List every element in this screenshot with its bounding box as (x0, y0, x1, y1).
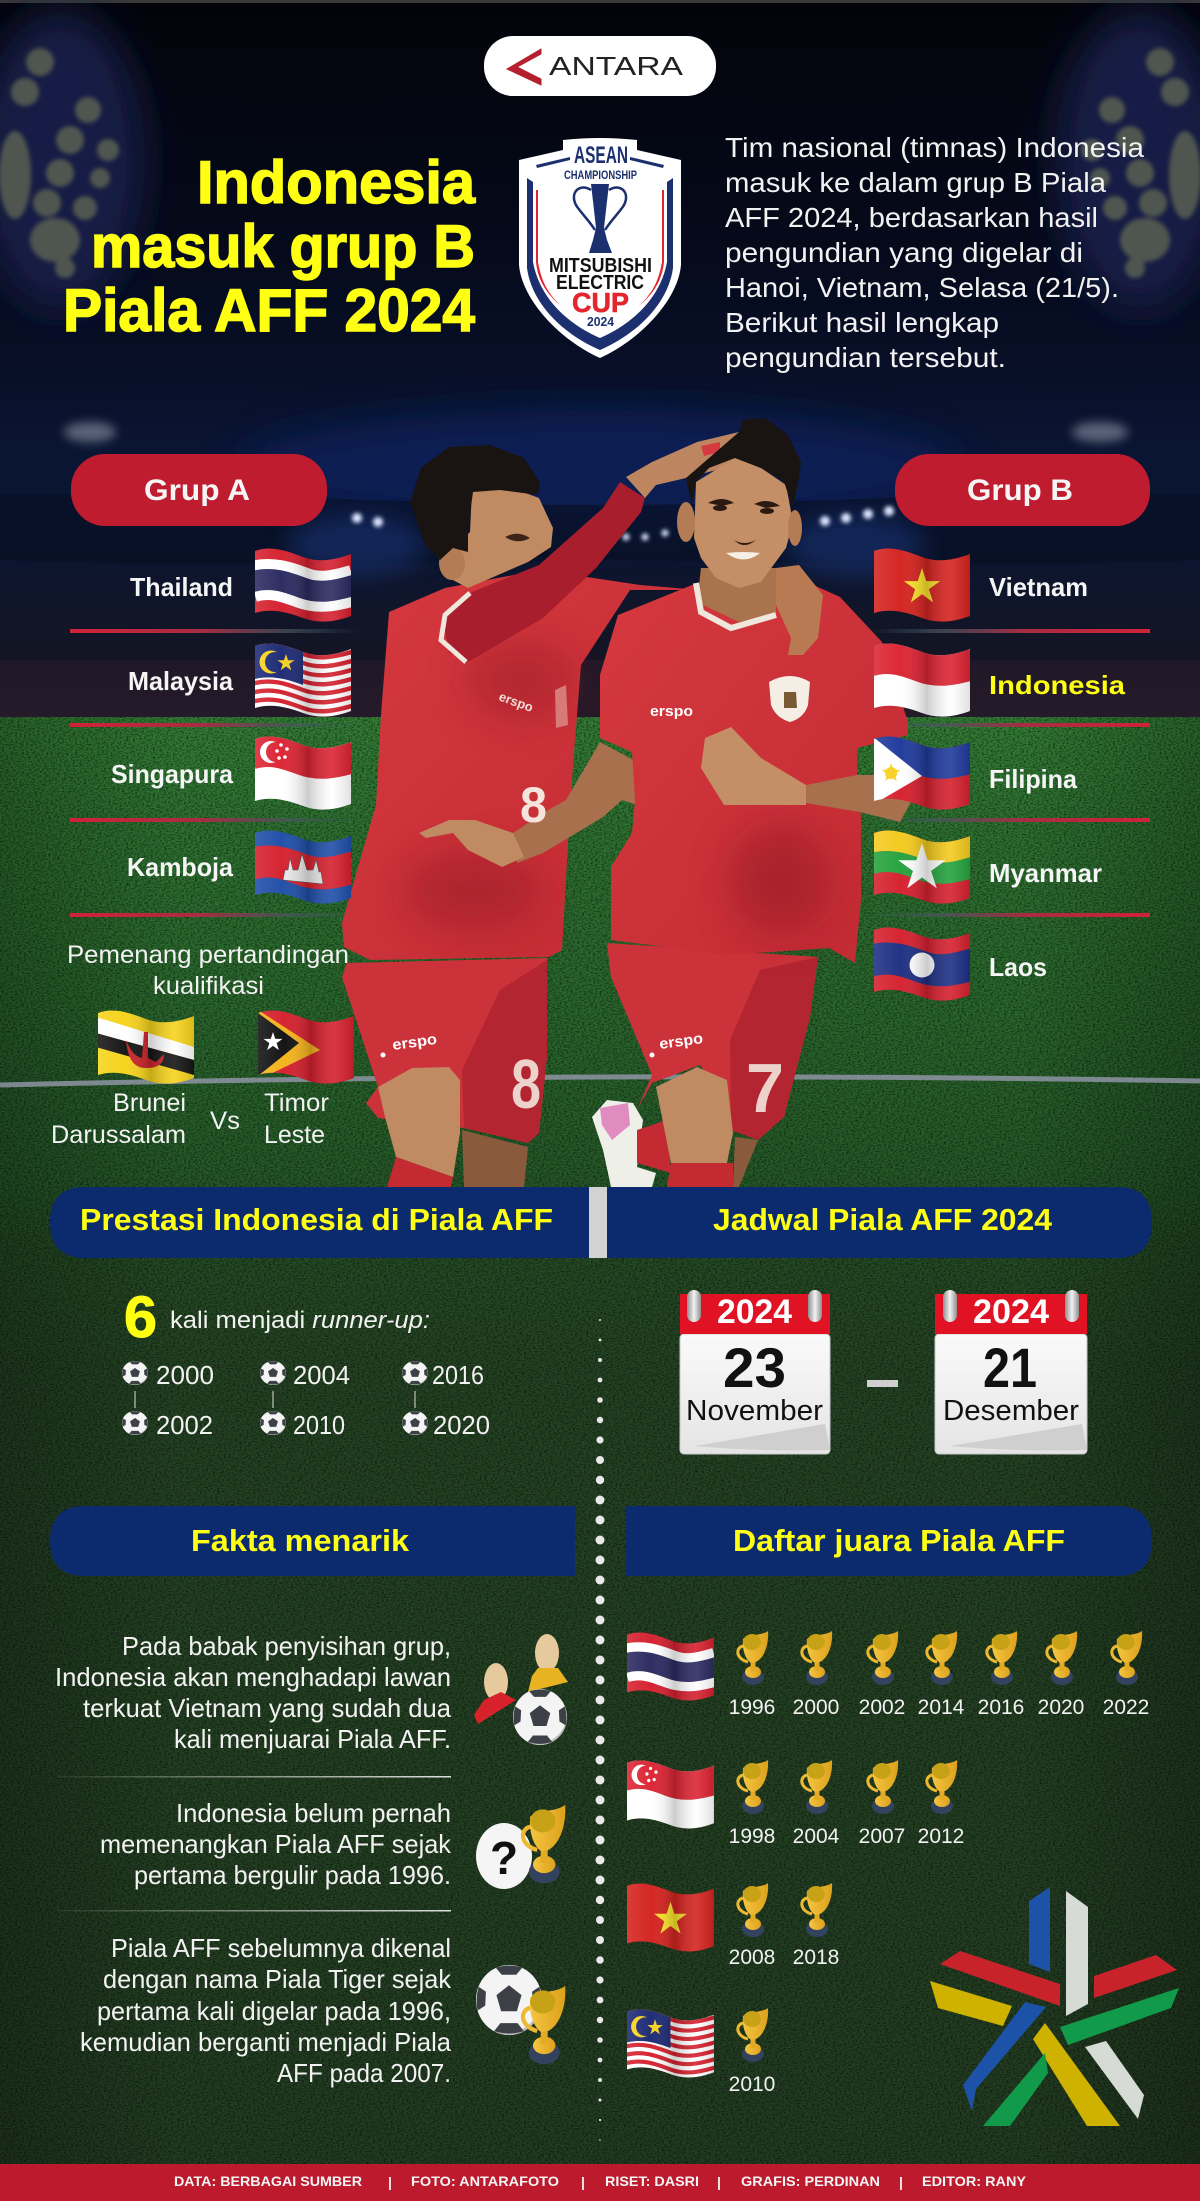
icon: ANTARA chevron (507, 49, 541, 85)
fact 3 text (80, 1933, 452, 2088)
Timor Leste label: Leste (264, 1121, 325, 1149)
intro paragraph: pengundian yang digelar di (725, 237, 1083, 268)
footer credits bar (0, 2164, 1200, 2201)
Malaysia champions row (623, 2008, 775, 2096)
Thailand row (130, 548, 355, 628)
Thailand champions row: 2020 (1038, 1696, 1084, 1719)
group A and B dividers (70, 629, 1150, 917)
Laos row: Laos (989, 952, 1047, 982)
icon: question mark and trophy (476, 1805, 565, 1889)
date range dash (867, 1380, 898, 1387)
intro paragraph: Tim nasional (timnas) Indonesia (725, 132, 1144, 163)
logo text: CUP (572, 287, 629, 318)
logo: AFF star (930, 1887, 1179, 2126)
footer credits bar: DATA: BERBAGAI SUMBER (174, 2173, 362, 2189)
logo: ANTARA pill (484, 36, 716, 96)
runner-up years: 2020 (433, 1410, 490, 1440)
fact 1 text: terkuat Vietnam yang sudah dua (83, 1693, 452, 1723)
runner-up years: 2004 (293, 1360, 350, 1390)
runner-up years: 2000 (156, 1360, 214, 1390)
fact 1 text: kali menjuarai Piala AFF. (174, 1724, 451, 1754)
Thailand champions row: 2002 (859, 1696, 905, 1719)
calendar: 21 Desember 2024: Desember (943, 1395, 1079, 1427)
calendar: 23 November 2024: 23 (723, 1336, 786, 1399)
footer credits bar: GRAFIS: PERDINAN (741, 2173, 880, 2189)
qualification caption: Pemenang pertandingan (67, 941, 349, 969)
Filipina row (870, 736, 1078, 816)
fact 2 text: memenangkan Piala AFF sejak (100, 1829, 452, 1859)
heading bar: Daftar juara (626, 1506, 1152, 1576)
panel: runner-up record (122, 1285, 490, 1440)
left player: 8 (520, 777, 547, 833)
Myanmar row: Myanmar (989, 858, 1102, 888)
right player: erspo (650, 703, 693, 720)
Kamboja row: Kamboja (127, 852, 234, 882)
year connectors (135, 1391, 415, 1408)
Laos row (870, 927, 1047, 1007)
title (63, 149, 476, 344)
Malaysia row (128, 643, 355, 723)
left player: 8 (511, 1045, 541, 1123)
Thailand champions row: 1996 (729, 1696, 775, 1719)
title: Indonesia (197, 149, 476, 216)
Thailand champions row: 2000 (793, 1696, 839, 1719)
fact 3 text: Piala AFF sebelumnya dikenal (111, 1933, 451, 1963)
Malaysia champions row: 2010 (729, 2073, 775, 2096)
footer credits bar: RISET: DASRI (605, 2173, 699, 2189)
footer credits bar: | (717, 2174, 721, 2190)
Singapura champions row: 2004 (793, 1825, 840, 1848)
qualification caption (67, 941, 349, 1000)
Vietnam champions row: 2018 (793, 1946, 839, 1969)
Timor Leste label: Timor (264, 1089, 329, 1117)
separator (57, 1910, 451, 1912)
title: masuk grup B (91, 213, 475, 280)
logo text (549, 142, 652, 329)
intro paragraph: pengundian tersebut. (725, 342, 1006, 373)
fact 3 text: AFF pada 2007. (277, 2058, 451, 2088)
fact 2 text: Indonesia belum pernah (176, 1798, 451, 1828)
Thailand row: Thailand (130, 572, 233, 602)
footer credits bar: FOTO: ANTARAFOTO (411, 2173, 559, 2189)
heading bar: Fakta menarik: Fakta menarik (191, 1523, 410, 1558)
Vietnam row: Vietnam (989, 572, 1088, 602)
flag: Brunei (96, 1010, 194, 1090)
Thailand champions row: 2022 (1103, 1696, 1149, 1719)
group B heading pill (895, 454, 1150, 526)
fact 3 text: pertama kali digelar pada 1996, (97, 1996, 451, 2026)
footer credits bar: | (581, 2174, 585, 2190)
background: night stadium sky (0, 0, 1200, 720)
panel: list of champions (623, 1631, 1149, 2096)
fact 1 text (55, 1631, 452, 1754)
logo text: ELECTRIC (556, 272, 644, 294)
group B heading pill: Grup B (967, 474, 1073, 507)
calendar: 21 Desember 2024: 21 (983, 1336, 1037, 1399)
Brunei Darussalam label: Brunei (113, 1089, 186, 1117)
title: Piala AFF 2024 (63, 277, 476, 344)
Thailand champions row: 2014 (918, 1696, 965, 1719)
Thailand champions row (623, 1631, 1149, 1719)
logo text: MITSUBISHI (549, 255, 652, 277)
Singapura champions row: 2007 (859, 1825, 905, 1848)
logo: Mitsubishi Electric Cup shield (519, 138, 681, 358)
left player: erspo (391, 1031, 438, 1054)
icon: question mark and trophy: ? (490, 1832, 518, 1884)
fact 1 text: Indonesia akan menghadapi lawan (55, 1662, 451, 1692)
group A heading pill (71, 454, 327, 526)
runner-up years (156, 1360, 490, 1440)
Singapura row: Singapura (111, 759, 234, 789)
Singapura row (111, 736, 355, 816)
photo: two Indonesian players celebrating (342, 418, 912, 1187)
fact 2 text: pertama bergulir pada 1996. (134, 1860, 451, 1890)
intro paragraph: AFF 2024, berdasarkan hasil (725, 202, 1098, 233)
Vietnam row (874, 548, 1088, 628)
Singapura champions row (623, 1760, 964, 1848)
runner-up caption: kali menjadi runner-up: (170, 1307, 430, 1334)
logo wordmark: ANTARA (549, 51, 684, 81)
heading bar: Prestasi Indonesia: Prestasi Indonesia di Piala AFF (80, 1202, 553, 1237)
left player (342, 432, 750, 1187)
Kamboja row (127, 830, 355, 910)
qualification caption: kualifikasi (153, 972, 264, 1000)
calendar: 23 November 2024: November (686, 1395, 823, 1427)
separator (57, 1776, 451, 1778)
fact 3 text: kemudian berganti menjadi Piala (80, 2027, 452, 2057)
logo text: ASEAN (574, 142, 628, 169)
fact 3 text: dengan nama Piala Tiger sejak (103, 1964, 452, 1994)
panel: group A (71, 454, 355, 910)
right player: 7 (746, 1049, 784, 1127)
Vietnam champions row: 2008 (729, 1946, 775, 1969)
big number 6: 6 (124, 1285, 157, 1350)
footer credits bar: | (899, 2174, 903, 2190)
calendar: 23 November 2024 (680, 1290, 830, 1454)
footer credits bar: EDITOR: RANY (922, 2173, 1027, 2189)
heading bar: Jadwal (607, 1187, 1152, 1258)
Vietnam champions row (627, 1883, 839, 1969)
logo text: CHAMPIONSHIP (564, 168, 637, 182)
icon: players and ball (474, 1634, 568, 1745)
intro paragraph: masuk ke dalam grup B Piala (725, 167, 1106, 198)
Indonesia row (870, 643, 1126, 723)
intro paragraph: Hanoi, Vietnam, Selasa (21/5). (725, 272, 1119, 303)
runner-up years: 2010 (293, 1410, 345, 1440)
Myanmar row (870, 830, 1102, 910)
heading bar: Fakta menarik (50, 1506, 575, 1576)
calendar: 21 Desember 2024: 2024 (973, 1293, 1049, 1331)
Brunei Darussalam label (51, 1089, 186, 1149)
runner-up years: 2016 (432, 1360, 484, 1390)
Singapura champions row: 2012 (918, 1825, 964, 1848)
trophy mark (589, 184, 612, 253)
Timor Leste label (264, 1089, 329, 1149)
Indonesia row: Indonesia (989, 670, 1126, 700)
versus label: Vs (210, 1107, 240, 1135)
intro paragraph: Berikut hasil lengkap (725, 307, 999, 338)
Thailand champions row: 2016 (978, 1696, 1024, 1719)
runner-up years: 2002 (156, 1410, 213, 1440)
fact 2 text (100, 1798, 452, 1890)
calendar: 21 Desember 2024 (935, 1290, 1087, 1454)
calendar: 23 November 2024: 2024 (717, 1293, 792, 1331)
panel: interesting facts (55, 1631, 568, 2088)
icon: footballs (122, 1361, 428, 1435)
Malaysia row: Malaysia (128, 666, 234, 696)
icon: ball and trophy (476, 1965, 565, 2064)
heading bar: Prestasi Indonesia (50, 1187, 589, 1258)
right player: 7 (720, 757, 749, 815)
panel: qualification winner (51, 941, 354, 1149)
logo text: 2024 (587, 314, 615, 329)
heading bar divider (589, 1187, 607, 1258)
Filipina row: Filipina (989, 764, 1078, 794)
heading bar: Jadwal: Jadwal Piala AFF 2024 (713, 1202, 1053, 1237)
panel: group B (870, 454, 1150, 1007)
background: football pitch grass (0, 717, 1200, 2201)
Singapura champions row: 1998 (729, 1825, 775, 1848)
right player (592, 418, 912, 1187)
group A heading pill: Grup A (144, 474, 250, 507)
right player: erspo (658, 1030, 704, 1053)
Brunei Darussalam label: Darussalam (51, 1121, 186, 1149)
heading bar: Daftar juara: Daftar juara Piala AFF (733, 1523, 1065, 1558)
footer credits bar: | (388, 2174, 392, 2190)
fact 1 text: Pada babak penyisihan grup, (122, 1631, 451, 1661)
flag: Timor Leste (258, 1010, 354, 1090)
intro paragraph (725, 132, 1144, 373)
left player: erspo (497, 689, 535, 715)
central dotted line (596, 1319, 604, 2141)
